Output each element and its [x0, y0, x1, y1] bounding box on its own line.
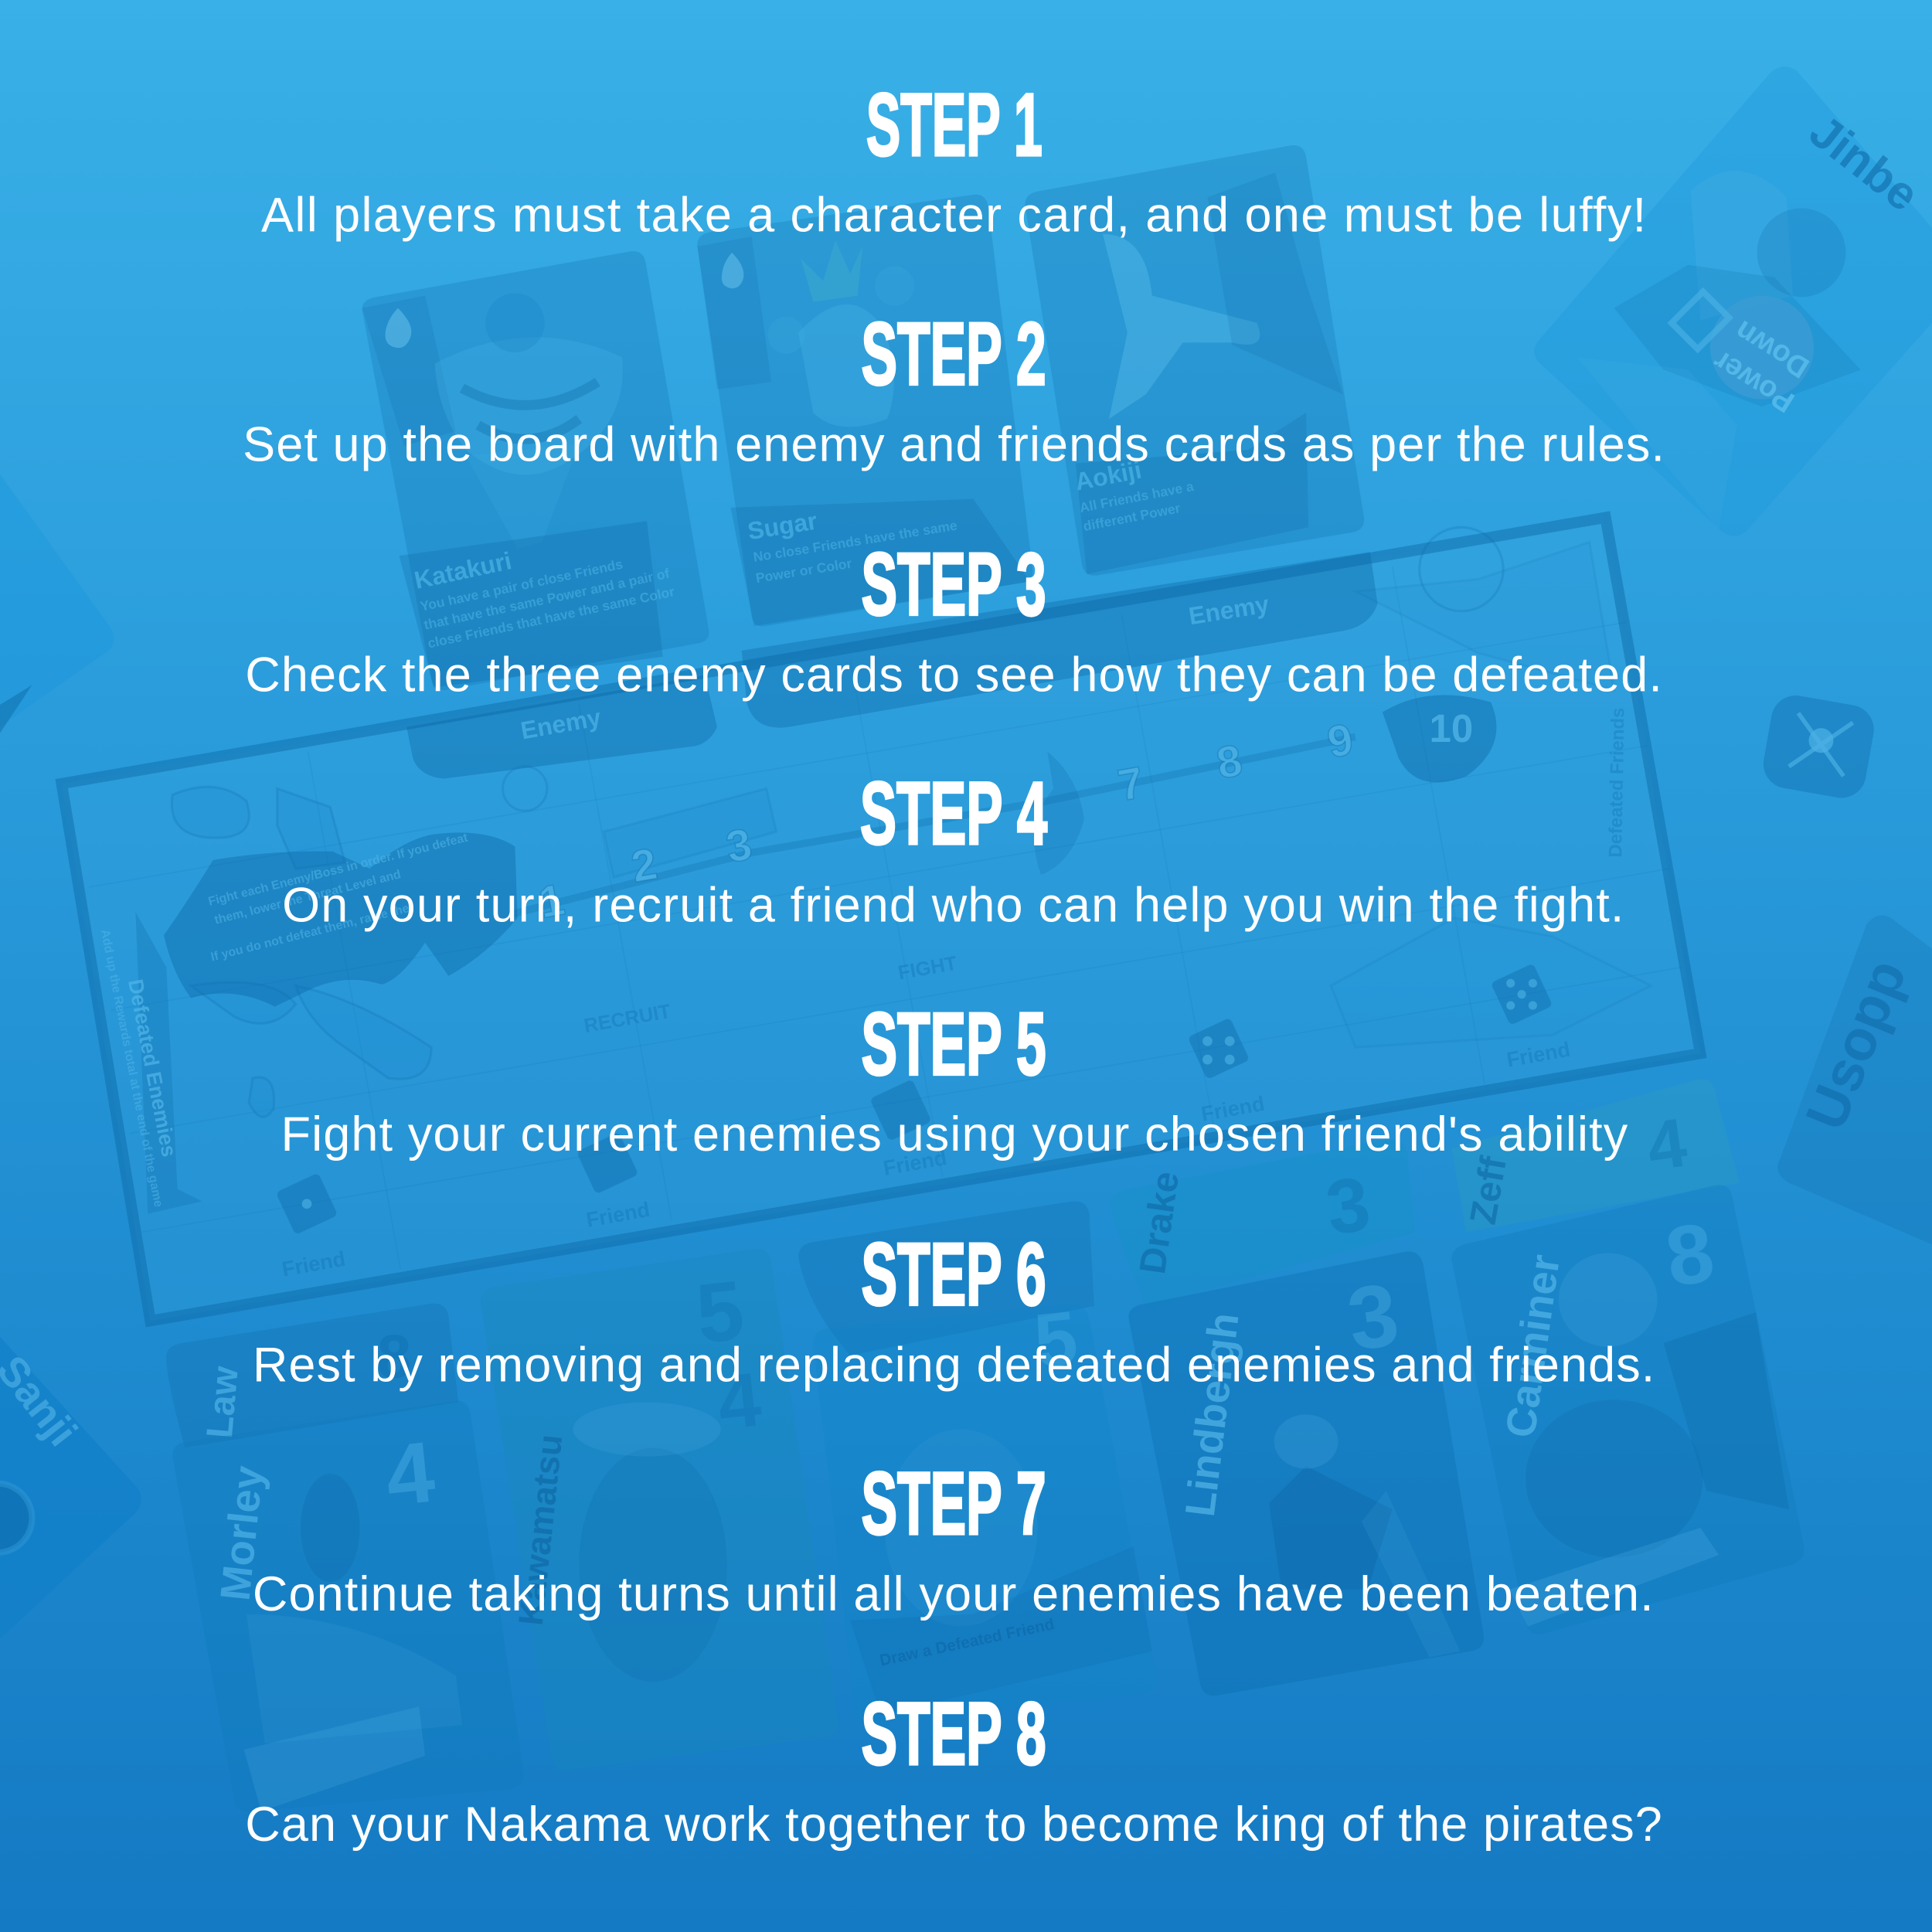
step 5: [281, 995, 1628, 1162]
card: Law: 8: [377, 1322, 411, 1391]
step 7: [253, 1454, 1654, 1621]
step 7 text: Continue taking turns until all your enemies have been beaten.: [253, 1567, 1654, 1621]
card: Sanji: [0, 1337, 141, 1639]
card: Katakuri: You have a pair of close Friends: [419, 556, 624, 614]
step 8: [245, 1685, 1662, 1852]
game board: [62, 518, 1700, 1321]
card: Carminer: 8: [1660, 1205, 1719, 1304]
threat track: [512, 695, 1496, 928]
threat track: 7: [1114, 758, 1148, 811]
step 4 title: STEP 4: [860, 764, 1047, 863]
card: Drake: 3: [1321, 1161, 1375, 1250]
card: Katakuri: that have the same Power and a pair of: [423, 566, 671, 633]
step 6 title: STEP 6: [861, 1225, 1046, 1324]
board labels: FIGHT: [896, 953, 959, 984]
card: Carminer: Carminer: [1497, 1252, 1569, 1440]
card: Aokiji: All Friends have a: [1078, 478, 1195, 515]
threat track: 1: [536, 875, 568, 928]
card: Zeff: Zeff: [1463, 1153, 1515, 1227]
step 2 title: STEP 2: [861, 304, 1046, 403]
map grid: [89, 566, 1682, 1269]
card: Sugar: No close Friends have the same: [752, 517, 958, 565]
enemy slot left: [406, 675, 717, 779]
card: Kawamatsu: [481, 1249, 838, 1770]
step 3: [245, 536, 1662, 702]
card: Morley: 4: [381, 1423, 439, 1524]
step 8 title: STEP 8: [861, 1685, 1046, 1784]
card: Franky: [813, 1295, 1156, 1723]
side panel: defeated enemies: Add up the Rewards total at the end of the game: [98, 928, 165, 1209]
board labels: Friend: [1505, 1037, 1572, 1072]
card: Kawamatsu: 5: [692, 1263, 748, 1361]
step 5 title: STEP 5: [861, 995, 1046, 1094]
step 3 text: Check the three enemy cards to see how they can be defeated.: [245, 648, 1662, 702]
card: Kawamatsu: Kawamatsu: [512, 1433, 570, 1628]
card: Morley: [172, 1401, 524, 1811]
step 2 text: Set up the board with enemy and friends cards as per the rules.: [243, 417, 1665, 471]
card: Jinbe: Power: [1707, 344, 1800, 419]
card: back centre: [798, 1201, 1094, 1355]
card: Katakuri: [362, 251, 709, 690]
card: Jinbe: Down: [1729, 314, 1815, 385]
step 2: [243, 304, 1665, 471]
card: Franky: Draw a Defeated Friend: [878, 1615, 1056, 1670]
card: Kawamatsu: 4: [713, 1356, 765, 1445]
card: Drake: Drake: [1132, 1169, 1187, 1277]
ink panel: fight rules: [164, 832, 518, 1007]
step 8 text: Can your Nakama work together to become king of the pirates?: [245, 1798, 1662, 1852]
card: Usopp: Usopp: [1794, 951, 1918, 1138]
card: Lindbergh: [1128, 1251, 1484, 1696]
board labels: [280, 707, 1629, 1281]
side panel: defeated enemies: Defeated Enemies: [124, 977, 182, 1158]
threat track: 9: [1324, 715, 1357, 767]
card: Drake: [1111, 1139, 1414, 1306]
threat track: 10: [1429, 706, 1473, 750]
card: Aokiji: different Power: [1082, 500, 1182, 534]
map islands: [172, 543, 1651, 1117]
card: Zeff: 4: [1642, 1103, 1692, 1185]
step 1: [261, 76, 1646, 243]
card: Lindbergh: Lindbergh: [1177, 1311, 1248, 1519]
step 7 title: STEP 7: [861, 1454, 1046, 1553]
ink panel: fight rules: them, lower the Threat Level and: [213, 868, 403, 927]
step 4: [282, 764, 1624, 933]
compass rose: [503, 527, 1503, 811]
card: Katakuri: close Friends that have the same Color: [427, 583, 676, 651]
card: Usopp: [1777, 915, 1932, 1244]
card: Sugar: Power or Color: [754, 556, 853, 586]
card: Aokiji: [1025, 145, 1364, 576]
card: left edge: [0, 474, 114, 733]
die: straw hat skull: [1760, 692, 1878, 801]
card: Katakuri: Katakuri: [412, 546, 514, 594]
card: Zeff: [1451, 1079, 1740, 1232]
card: Law: [166, 1304, 458, 1447]
enemy slot right: Enemy: [1187, 590, 1271, 630]
step 1 text: All players must take a character card, and one must be luffy!: [261, 189, 1646, 243]
card: Morley: Morley: [212, 1464, 272, 1603]
enemy slot left: Enemy: [519, 703, 603, 745]
dice pips: [302, 979, 1537, 1209]
friend dice slots: [276, 963, 1553, 1235]
board labels: Friend: [881, 1145, 948, 1180]
step 3 title: STEP 3: [861, 536, 1046, 634]
board labels: Friend: [1199, 1091, 1267, 1126]
ink panel: fight rules: If you do not defeat them, raise the: [209, 902, 410, 964]
step 1 title: STEP 1: [866, 76, 1043, 175]
side panel: defeated enemies: [98, 912, 202, 1213]
card: Jinbe: Jinbe: [1800, 104, 1929, 221]
step 6 text: Rest by removing and replacing defeated enemies and friends.: [253, 1338, 1655, 1392]
card: Aokiji: Aokiji: [1073, 456, 1144, 495]
ink panel: fight rules: Fight each Enemy/Boss in order. If you defeat: [207, 832, 470, 909]
step 4 text: On your turn, recruit a friend who can help you win the fight.: [282, 879, 1624, 933]
board labels: RECRUIT: [583, 1001, 672, 1037]
threat track: 2: [628, 839, 661, 892]
step 5 text: Fight your current enemies using your chosen friend's ability: [281, 1107, 1628, 1162]
card: Law: Law: [199, 1364, 247, 1440]
threat track: 8: [1213, 736, 1246, 788]
threat track: 3: [723, 819, 756, 872]
step 6: [253, 1225, 1655, 1392]
card: Sugar: Sugar: [746, 507, 819, 545]
board labels: Defeated Friends: [1605, 707, 1629, 858]
board labels: Friend: [280, 1247, 347, 1281]
card: Sugar: [697, 195, 1032, 626]
card: Jinbe: [1534, 66, 1932, 536]
card: Carminer: [1451, 1185, 1804, 1634]
card: Lindbergh: 3: [1342, 1265, 1404, 1369]
card: Franky: 5: [1030, 1295, 1081, 1384]
board labels: Friend: [584, 1197, 651, 1232]
enemy slot right: [742, 552, 1378, 728]
